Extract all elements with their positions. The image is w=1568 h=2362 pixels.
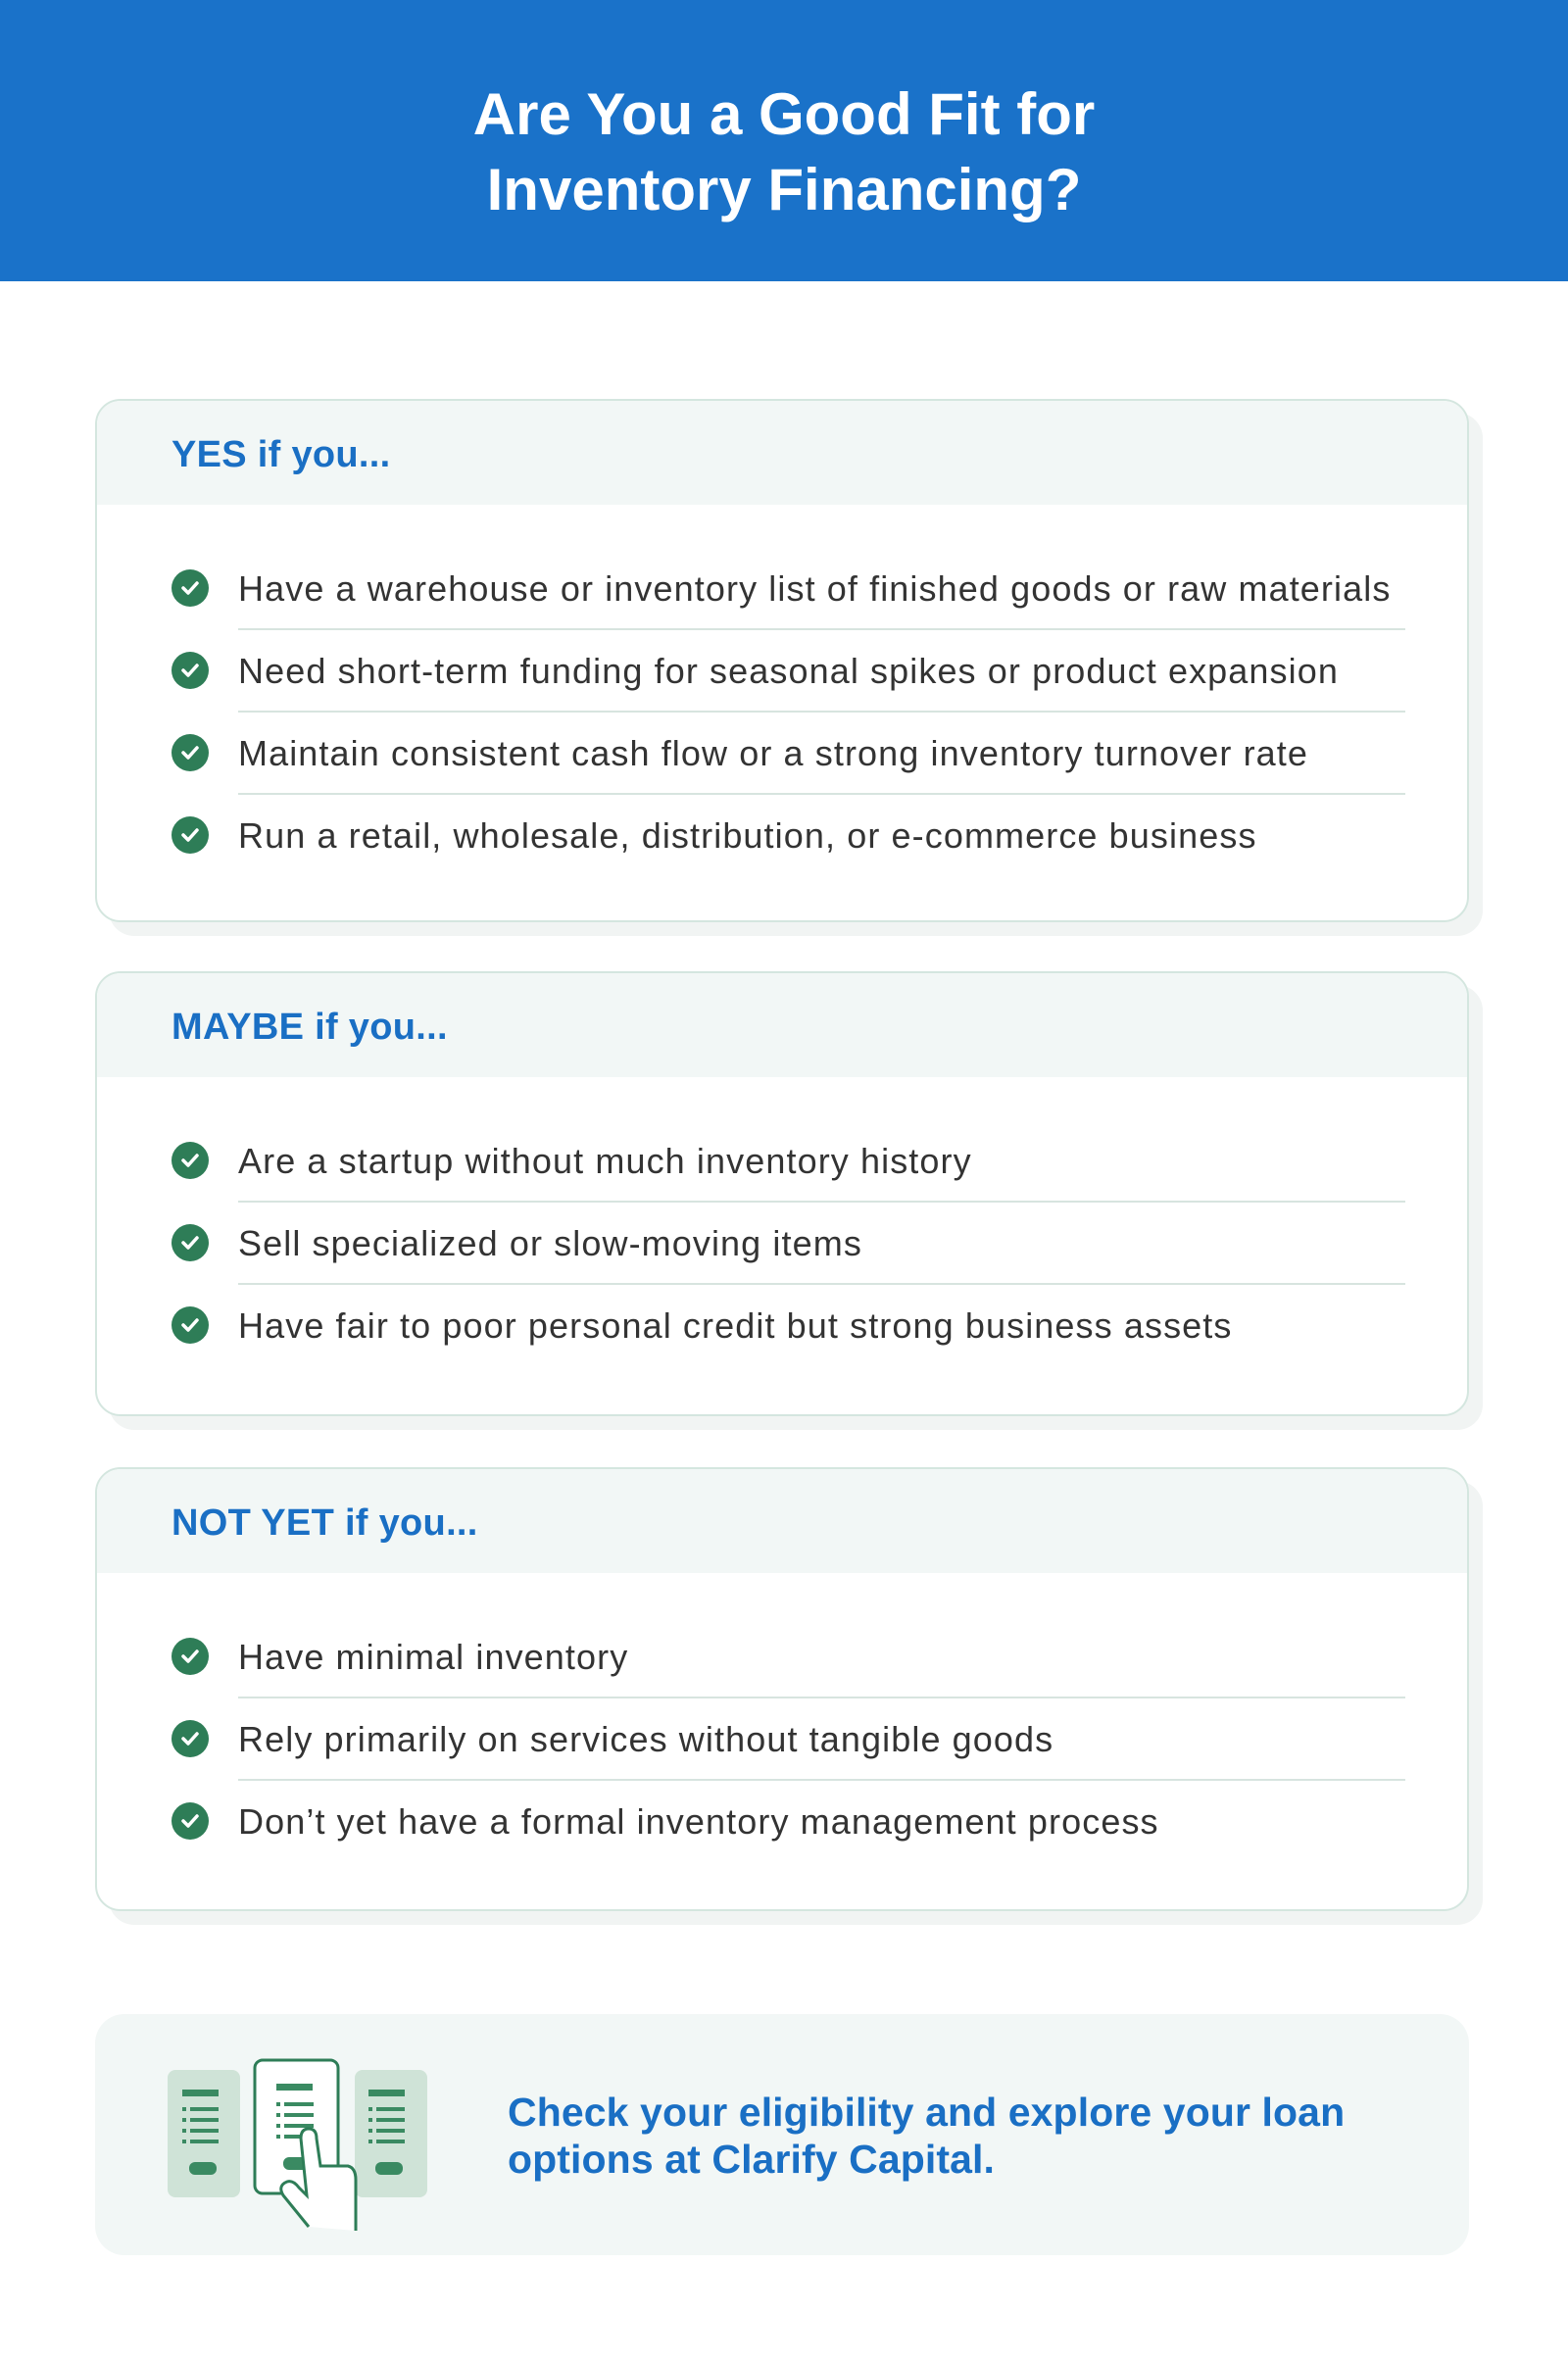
item: Sell specialized or slow-moving items (238, 1223, 862, 1263)
item: Rely primarily on services without tangible goods (238, 1719, 1054, 1759)
cta text (508, 2090, 1345, 2182)
title: Inventory Financing? (487, 157, 1081, 222)
title (0, 0, 1568, 281)
callout: cta (95, 2014, 1469, 2255)
icon: phone screens with hand (168, 2058, 427, 2231)
item: Need short-term funding for seasonal spikes or product expansion (238, 651, 1339, 691)
title: Are You a Good Fit for (473, 81, 1095, 147)
item (172, 1120, 1405, 1203)
heading: yes: YES if you... (172, 434, 390, 475)
heading: not yet (97, 1469, 1467, 1573)
item (172, 1698, 1405, 1781)
heading: yes (97, 401, 1467, 505)
cta text: options at Clarify Capital. (508, 2137, 995, 2182)
item (172, 548, 1405, 630)
heading: not yet: NOT YET if you... (172, 1502, 478, 1544)
item: Run a retail, wholesale, distribution, or e-commerce business (238, 815, 1257, 856)
panel: yes (95, 399, 1469, 922)
item (172, 630, 1405, 713)
heading: maybe (97, 973, 1467, 1077)
item (172, 713, 1405, 795)
heading: maybe: MAYBE if you... (172, 1007, 448, 1048)
panel: not yet (95, 1467, 1469, 1911)
item (172, 1616, 1405, 1698)
item (172, 1203, 1405, 1285)
item: Maintain consistent cash flow or a strong inventory turnover rate (238, 733, 1308, 773)
cta text: Check your eligibility and explore your loan (508, 2090, 1345, 2135)
item: Are a startup without much inventory history (238, 1141, 972, 1181)
item: Have a warehouse or inventory list of finished goods or raw materials (238, 568, 1391, 609)
item: Don’t yet have a formal inventory management process (238, 1801, 1159, 1842)
item: Have fair to poor personal credit but strong business assets (238, 1305, 1233, 1346)
panel: maybe (95, 971, 1469, 1416)
item: Have minimal inventory (238, 1637, 628, 1677)
